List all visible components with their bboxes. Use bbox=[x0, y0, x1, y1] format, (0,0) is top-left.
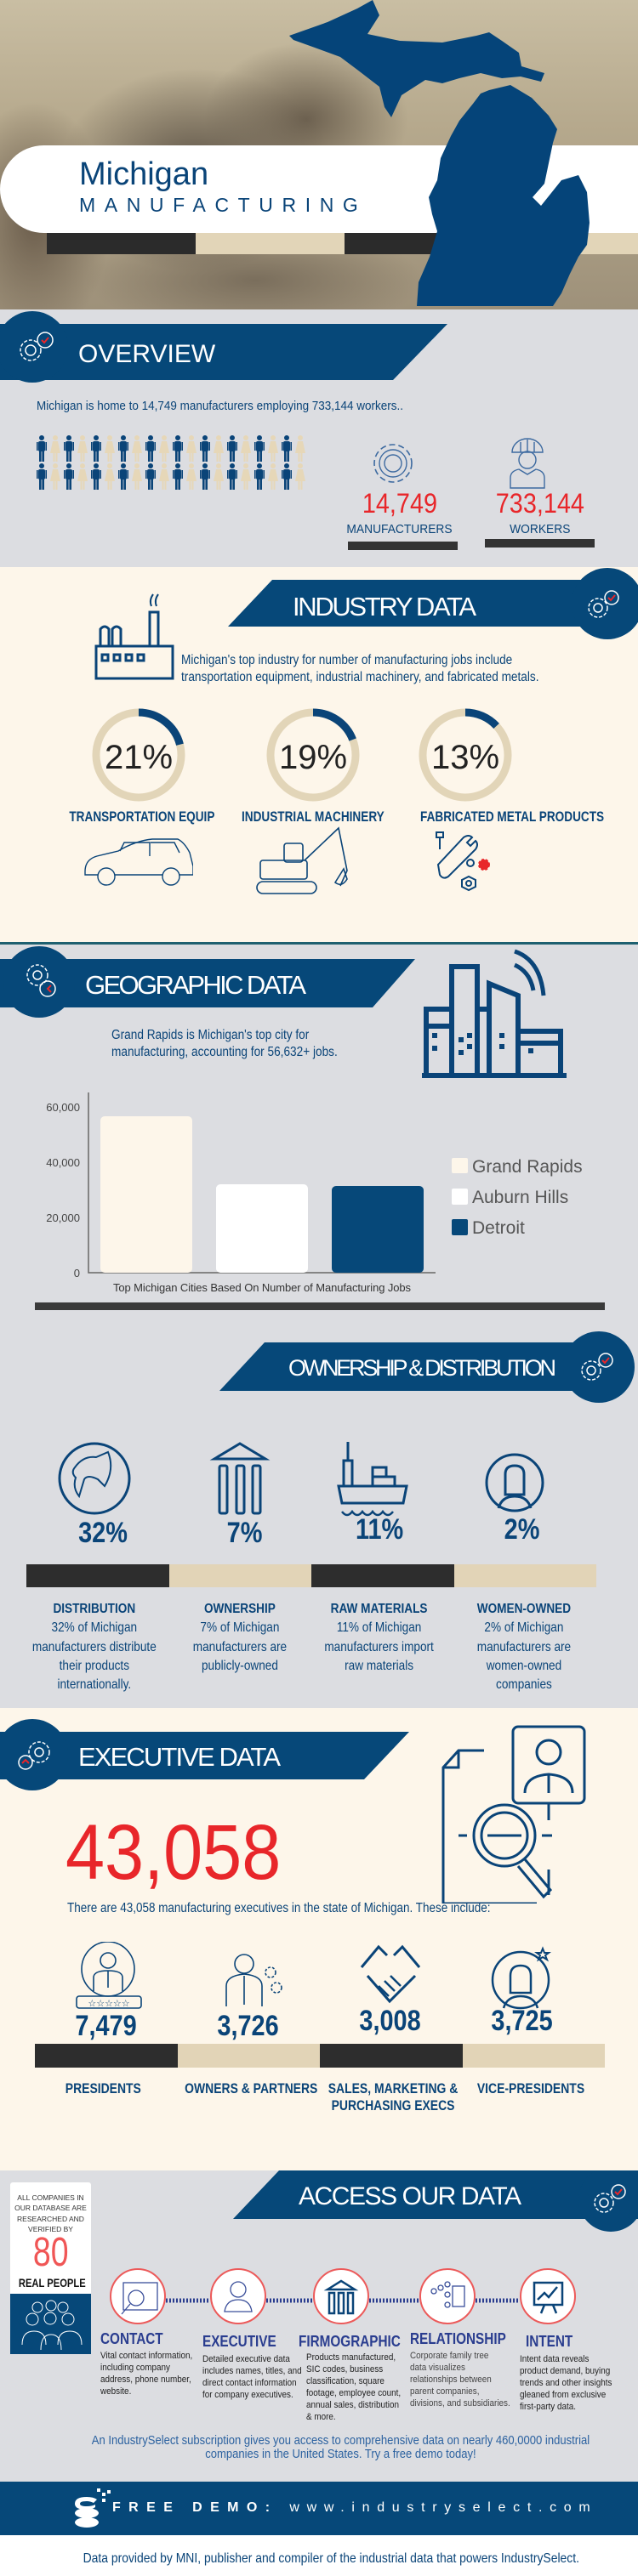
percentages: 11% bbox=[356, 1513, 403, 1546]
stat: manufacturers bbox=[347, 444, 458, 550]
percentages: 7% bbox=[227, 1517, 263, 1549]
column: relationship: Corporate family tree bbox=[410, 2351, 488, 2361]
column: firmographic: classification, square bbox=[306, 2376, 385, 2386]
descriptions: 32% of Michigan bbox=[52, 1620, 137, 1635]
bar chart: top cities: 60,000 bbox=[46, 1101, 80, 1114]
title banner bbox=[0, 145, 638, 233]
access heading banner bbox=[233, 2170, 638, 2232]
icon: tools bbox=[436, 831, 490, 891]
descriptions: 7% of Michigan bbox=[201, 1620, 279, 1635]
panel: overview bbox=[0, 309, 638, 567]
column: relationship: relationships between bbox=[410, 2375, 492, 2385]
column: intent: first-party data. bbox=[520, 2402, 576, 2412]
descriptions: their products bbox=[60, 1659, 129, 1673]
stat: workers: WORKERS bbox=[510, 522, 571, 536]
column: firmographic bbox=[299, 2333, 405, 2423]
column: relationship: RELATIONSHIP bbox=[410, 2330, 506, 2347]
card: 80 real people: 80 bbox=[33, 2230, 68, 2275]
column: executive: EXECUTIVE bbox=[202, 2333, 276, 2350]
bar chart: top cities: 20,000 bbox=[46, 1211, 80, 1224]
legend: Detroit bbox=[472, 1218, 525, 1238]
icon: crowd bbox=[10, 2294, 91, 2354]
descriptions: companies bbox=[496, 1677, 552, 1692]
legend: Auburn Hills bbox=[472, 1188, 568, 1207]
subtitle: MANUFACTURING: MANUFACTURING bbox=[79, 194, 367, 216]
industry intro text: transportation equipment, industrial machinery, and fabricated metals. bbox=[181, 670, 539, 684]
descriptions: raw materials bbox=[345, 1659, 413, 1673]
panel: executive data bbox=[0, 1708, 638, 2170]
icon: factory bbox=[95, 593, 174, 680]
column: contact: CONTACT bbox=[100, 2330, 163, 2347]
donut: 21% transportation: 21% bbox=[105, 739, 173, 776]
descriptions: manufacturers are bbox=[477, 1640, 571, 1654]
executive heading banner: EXECUTIVE DATA bbox=[78, 1742, 281, 1772]
percentages bbox=[78, 1513, 540, 1549]
card: 80 real people: VERIFIED BY bbox=[28, 2225, 73, 2233]
percentages: 2% bbox=[504, 1513, 540, 1546]
column: firmographic: annual sales, distribution bbox=[306, 2400, 399, 2410]
industry heading banner: INDUSTRY DATA bbox=[293, 592, 476, 621]
card: 80 real people: RESEARCHED AND bbox=[17, 2215, 84, 2223]
donut: 13% fabricated metals: 13% bbox=[431, 739, 499, 776]
geographic intro text bbox=[111, 1028, 338, 1059]
column: executive: for company executives. bbox=[202, 2390, 293, 2400]
subscription text bbox=[0, 2434, 638, 2461]
column: intent: Intent data reveals bbox=[520, 2354, 589, 2364]
descriptions: DISTRIBUTION bbox=[54, 1602, 135, 1616]
industry intro text: Michigan's top industry for number of manufacturing jobs include bbox=[181, 653, 512, 667]
ownership heading banner: OWNERSHIP & DISTRIBUTION bbox=[288, 1355, 556, 1381]
column: contact: including company bbox=[100, 2363, 170, 2373]
executive labels: OWNERS & PARTNERS bbox=[185, 2080, 317, 2097]
ownership heading banner bbox=[219, 1331, 635, 1403]
descriptions: internationally. bbox=[58, 1677, 131, 1692]
column: relationship: parent companies, bbox=[410, 2386, 479, 2397]
color bar bbox=[35, 2044, 605, 2068]
map: Michigan bbox=[289, 0, 590, 306]
hero background photo bbox=[0, 0, 638, 309]
executive labels bbox=[65, 2080, 584, 2114]
descriptions: publicly-owned bbox=[202, 1659, 278, 1673]
column: firmographic: SIC codes, business bbox=[306, 2364, 383, 2375]
donut: 13% fabricated metals bbox=[419, 709, 604, 891]
executive heading banner bbox=[0, 1719, 409, 1790]
overview heading banner bbox=[0, 311, 447, 383]
footer credit text: Data provided by MNI, publisher and compiler of the industrial data that powers IndustrySelect. bbox=[83, 2551, 579, 2566]
executive labels: PURCHASING EXECS bbox=[332, 2097, 454, 2114]
color bar bbox=[26, 1564, 596, 1587]
icon: gears bbox=[20, 332, 53, 360]
donut: 19% machinery: INDUSTRIAL MACHINERY bbox=[242, 809, 385, 825]
donut: 21% transportation bbox=[69, 709, 214, 886]
descriptions: manufacturers are bbox=[193, 1640, 287, 1654]
column: executive: direct contact information bbox=[202, 2378, 297, 2388]
card: 80 real people: ALL COMPANIES IN bbox=[17, 2193, 84, 2202]
descriptions: manufacturers import bbox=[325, 1640, 434, 1654]
column: executive: includes names, titles, and bbox=[202, 2366, 302, 2376]
column: intent bbox=[526, 2333, 632, 2413]
bar chart: top cities: 0 bbox=[74, 1267, 80, 1279]
descriptions: 2% of Michigan bbox=[485, 1620, 563, 1635]
overview heading banner: OVERVIEW bbox=[78, 340, 216, 368]
executive counts: 3,726 bbox=[218, 2010, 279, 2042]
big number 43,058: 43,058 bbox=[66, 1809, 281, 1896]
icon: worker bbox=[510, 438, 545, 489]
column: firmographic: footage, employee count, bbox=[306, 2388, 401, 2398]
icons: executives: ☆☆☆☆☆ bbox=[88, 1998, 130, 2009]
descriptions bbox=[32, 1602, 571, 1692]
access heading banner: ACCESS OUR DATA bbox=[299, 2182, 521, 2210]
footer credit text bbox=[0, 2535, 638, 2576]
bar chart: top cities bbox=[35, 1092, 605, 1310]
donut: 19% machinery: 19% bbox=[279, 739, 347, 776]
card: 80 real people: OUR DATABASE ARE bbox=[14, 2204, 87, 2212]
icons row: globe, columns, ship, woman bbox=[58, 1442, 544, 1517]
industry heading banner bbox=[228, 568, 638, 639]
executive labels: VICE-PRESIDENTS bbox=[477, 2080, 584, 2097]
legend bbox=[452, 1157, 583, 1238]
column: firmographic: FIRMOGRAPHIC bbox=[299, 2333, 401, 2350]
icon: gear bbox=[373, 444, 413, 483]
subscription text: An IndustrySelect subscription gives you access to comprehensive data on nearly 460,0000 industrial bbox=[91, 2433, 590, 2448]
executive labels: SALES, MARKETING & bbox=[328, 2080, 458, 2097]
descriptions: RAW MATERIALS bbox=[331, 1602, 428, 1616]
descriptions: 11% of Michigan bbox=[337, 1620, 422, 1635]
column: executive: Detailed executive data bbox=[202, 2354, 290, 2364]
descriptions: women-owned bbox=[487, 1659, 561, 1673]
column: contact: website. bbox=[100, 2386, 131, 2397]
icon: city buildings bbox=[422, 949, 567, 1078]
data types text bbox=[100, 2330, 612, 2422]
geographic intro text: Grand Rapids is Michigan's top city for bbox=[111, 1028, 309, 1042]
stat: workers bbox=[485, 438, 595, 548]
executive counts: 3,725 bbox=[492, 2005, 553, 2037]
free demo url text: FREE DEMO: www.industryselect.com bbox=[112, 2500, 597, 2515]
percentages: 32% bbox=[78, 1517, 128, 1549]
column: contact: Vital contact information, bbox=[100, 2351, 192, 2361]
geographic heading banner: GEOGRAPHIC DATA bbox=[85, 970, 306, 1000]
column: relationship bbox=[410, 2330, 516, 2409]
column: firmographic: Products manufactured, bbox=[306, 2352, 396, 2363]
icons: executives bbox=[76, 1942, 551, 2010]
executive labels: PRESIDENTS bbox=[65, 2080, 141, 2097]
column: executive bbox=[202, 2333, 300, 2401]
panel: access our data bbox=[0, 2170, 638, 2482]
stat: manufacturers: MANUFACTURERS bbox=[347, 522, 453, 536]
stat: workers: 733,144 bbox=[496, 488, 584, 519]
stat: manufacturers: 14,749 bbox=[362, 488, 437, 519]
icon: document with magnifier bbox=[442, 1726, 585, 1904]
column: contact: address, phone number, bbox=[100, 2375, 191, 2385]
descriptions: WOMEN-OWNED bbox=[477, 1602, 571, 1616]
legend: Grand Rapids bbox=[472, 1157, 583, 1177]
column: relationship: data visualizes bbox=[410, 2363, 465, 2373]
card: 80 real people: REAL PEOPLE bbox=[19, 2276, 86, 2289]
executive counts: 3,008 bbox=[360, 2005, 421, 2037]
executive intro text: There are 43,058 manufacturing executives in the state of Michigan. These include: bbox=[67, 1901, 490, 1915]
bar chart: top cities: 40,000 bbox=[46, 1156, 80, 1169]
column: firmographic: & more. bbox=[306, 2412, 336, 2422]
panel: industry data bbox=[0, 567, 638, 942]
icon: database logo bbox=[73, 2488, 112, 2529]
people pictogram bbox=[37, 435, 305, 490]
hero color bars bbox=[47, 233, 638, 254]
title: Michigan: Michigan bbox=[79, 156, 208, 192]
descriptions: OWNERSHIP bbox=[204, 1602, 276, 1616]
footer: free demo bar bbox=[0, 2482, 638, 2535]
donut: 21% transportation: TRANSPORTATION EQUIP bbox=[69, 809, 214, 825]
geographic heading banner bbox=[0, 946, 415, 1018]
donut: 19% machinery bbox=[242, 709, 385, 894]
panel: ownership & distribution bbox=[0, 1314, 638, 1708]
icon: excavator bbox=[256, 826, 348, 894]
column: contact bbox=[100, 2330, 192, 2397]
descriptions: manufacturers distribute bbox=[32, 1640, 157, 1654]
executive counts: 7,479 bbox=[76, 2010, 137, 2042]
geographic intro text: manufacturing, accounting for 56,632+ jobs. bbox=[111, 1045, 338, 1059]
donut: 13% fabricated metals: FABRICATED METAL PRODUCTS bbox=[420, 809, 604, 825]
column: relationship: divisions, and subsidiaries. bbox=[410, 2398, 510, 2409]
bar chart: top cities: Top Michigan Cities Based On Number of Manufacturing Jobs bbox=[113, 1281, 412, 1294]
column: intent: trends and other insights bbox=[520, 2378, 612, 2388]
industry intro text bbox=[181, 653, 539, 684]
overview intro text: Michigan is home to 14,749 manufacturers employing 733,144 workers.. bbox=[37, 400, 403, 413]
column: intent: product demand, buying bbox=[520, 2366, 610, 2376]
card: 80 real people bbox=[10, 2182, 91, 2354]
data type connectors bbox=[110, 2268, 576, 2324]
column: intent: gleaned from exclusive bbox=[520, 2390, 606, 2400]
executive counts bbox=[76, 2005, 553, 2042]
subscription text: companies in the United States. Try a free demo today! bbox=[205, 2447, 476, 2461]
column: intent: INTENT bbox=[526, 2333, 572, 2350]
icon: car bbox=[84, 838, 193, 886]
panel: geographic data bbox=[0, 945, 638, 1314]
